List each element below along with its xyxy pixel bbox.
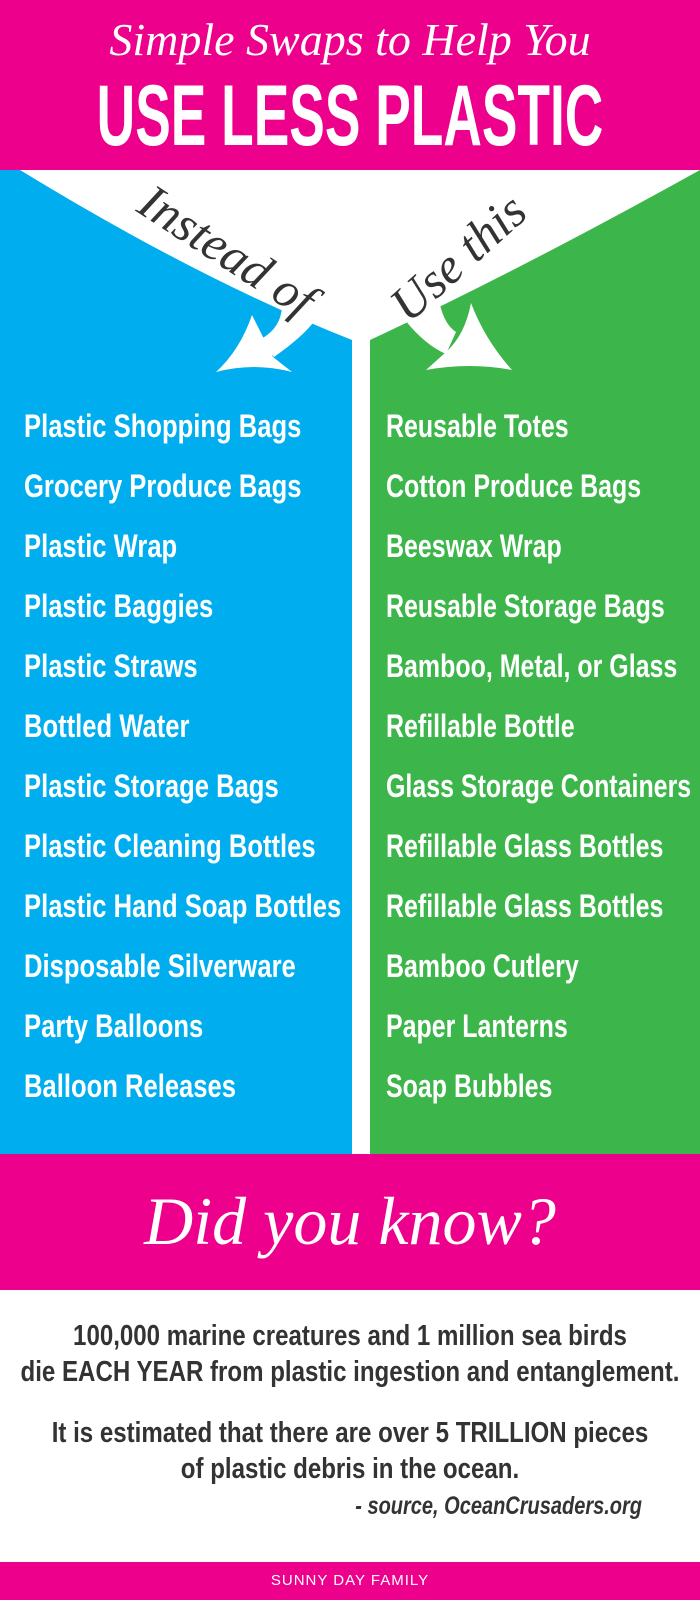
footer [0, 1562, 700, 1600]
item list right: Paper Lanterns [386, 1008, 568, 1044]
item list left: Grocery Produce Bags [24, 468, 301, 504]
item list left: Plastic Baggies [24, 588, 213, 624]
fact 1: 100,000 marine creatures and 1 million sea birds [73, 1320, 627, 1352]
title: USE LESS PLASTIC [97, 68, 603, 164]
fact 2: of plastic debris in the ocean. [181, 1453, 519, 1485]
item list right: Glass Storage Containers [386, 768, 691, 804]
item list right: Reusable Storage Bags [386, 588, 665, 624]
item list right: Refillable Bottle [386, 708, 575, 744]
item list left: Plastic Straws [24, 648, 198, 684]
panel: instead of [0, 170, 352, 1154]
item list right: Bamboo Cutlery [386, 948, 579, 984]
item list right: Beeswax Wrap [386, 528, 562, 564]
banner heading: Did you know? [144, 1183, 556, 1259]
arrow: right [405, 303, 512, 370]
item list right: Cotton Produce Bags [386, 468, 641, 504]
fact 2: It is estimated that there are over 5 TRILLION pieces [52, 1417, 648, 1449]
header [0, 0, 700, 170]
label: use this: Use this [379, 182, 537, 332]
item list left: Plastic Shopping Bags [24, 408, 301, 444]
item list left: Bottled Water [24, 708, 189, 744]
item list left: Balloon Releases [24, 1068, 236, 1104]
item list right [386, 408, 691, 1104]
source: - source, OceanCrusaders.org [355, 1492, 642, 1520]
arrow: left [216, 302, 315, 372]
did you know banner [0, 1154, 700, 1290]
item list right: Soap Bubbles [386, 1068, 552, 1104]
item list right: Refillable Glass Bottles [386, 828, 663, 864]
label: instead of: Instead of [129, 173, 326, 328]
item list left: Plastic Hand Soap Bottles [24, 888, 341, 924]
item list left: Plastic Wrap [24, 528, 177, 564]
item list left [24, 408, 341, 1104]
fact 1: die EACH YEAR from plastic ingestion and entanglement. [21, 1356, 679, 1388]
fact 2 [52, 1417, 648, 1485]
white wedge with arrows [20, 170, 700, 372]
item list left: Plastic Cleaning Bottles [24, 828, 316, 864]
item list left: Disposable Silverware [24, 948, 296, 984]
subtitle: Simple Swaps to Help You [109, 14, 591, 65]
footer: SUNNY DAY FAMILY [271, 1572, 429, 1589]
fact 1 [21, 1320, 679, 1388]
item list right: Bamboo, Metal, or Glass [386, 648, 677, 684]
item list right: Reusable Totes [386, 408, 569, 444]
item list left: Party Balloons [24, 1008, 203, 1044]
item list right: Refillable Glass Bottles [386, 888, 663, 924]
panel: use this [370, 170, 700, 1154]
item list left: Plastic Storage Bags [24, 768, 279, 804]
